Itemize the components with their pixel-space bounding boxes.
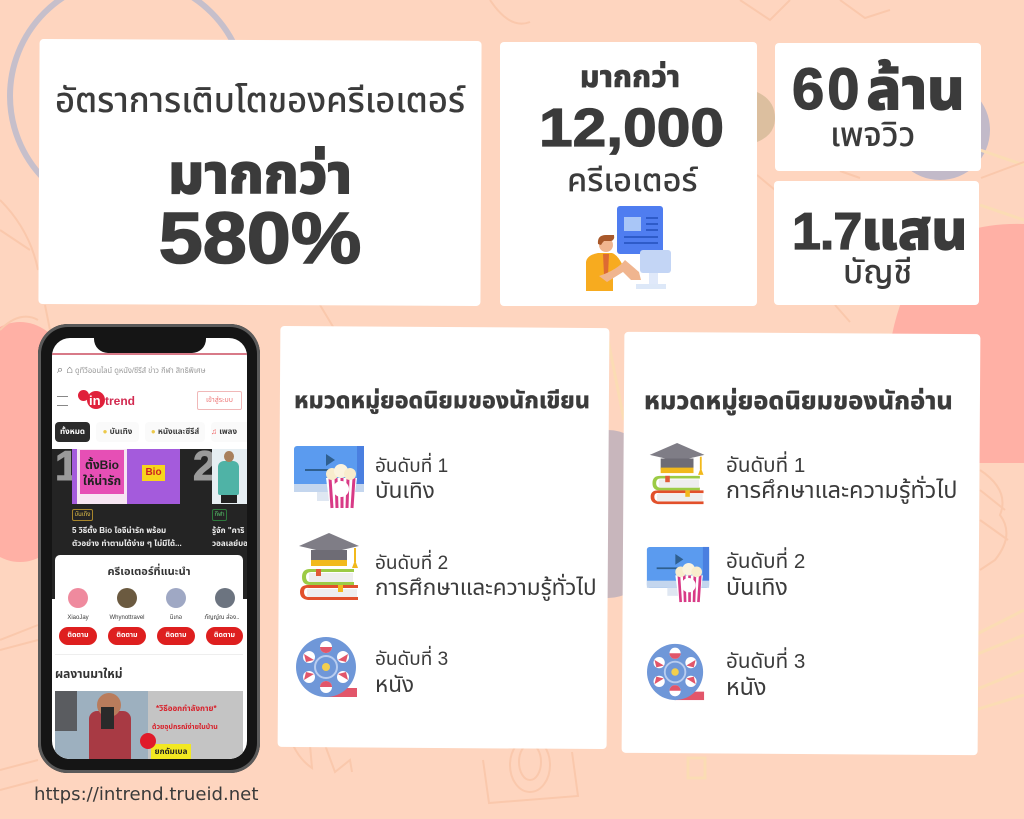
- stat: 170 thousand: 1.7แสน: [792, 199, 968, 261]
- category tabs: ทั้งหมด: [60, 427, 85, 436]
- rank 3 text: [726, 647, 805, 700]
- video thumbnail: ยกดัมเบล: [155, 747, 187, 756]
- category chip 1: บันเทิง: [75, 512, 90, 518]
- article thumbnail 1: ให้น่ารัก: [83, 474, 121, 488]
- panel: writers' popular categories: [279, 327, 608, 748]
- article text 1: 5 วิธีตั้ง Bio ไอจีน่ารัก พร้อม: [72, 526, 166, 535]
- label: creators: ครีเอเตอร์: [567, 162, 698, 198]
- heading: creator growth rate: อัตราการเติบโตของครีเอเตอร์: [55, 82, 465, 120]
- rank 3 text: อันดับที่ 3: [375, 649, 448, 670]
- top navigation: ⌕ ⌂ ดูทีวีออนไลน์ ดูหนัง/ซีรีส์ ข่าว กีฬา สิทธิพิเศษ: [57, 364, 206, 376]
- trending dark section: [52, 449, 247, 599]
- article thumbnail 2: [212, 449, 247, 504]
- follow buttons: ติดตาม: [67, 632, 89, 639]
- category tabs: ● บันเทิง: [103, 427, 132, 436]
- rank 2 text: การศึกษาและความรู้ทั่วไป: [375, 575, 597, 600]
- label: accounts: บัญชี: [843, 253, 912, 290]
- panel: recommended creators: [55, 555, 243, 759]
- heading: writers' popular categories: หมวดหมู่ยอดนิยมของนักเขียน: [294, 387, 590, 413]
- panel: number of creators: [500, 42, 757, 306]
- article text 1: [72, 525, 182, 548]
- notch: [94, 336, 206, 353]
- stat: 580%: 580%: [159, 199, 361, 279]
- icon: education: [299, 533, 359, 600]
- article thumbnail 1: Bio: [145, 467, 162, 478]
- video thumbnail: [55, 691, 243, 759]
- panel: accounts: [774, 181, 979, 305]
- icon: film reel: [296, 637, 357, 697]
- intrend logo: [78, 390, 135, 409]
- article text 2: รู้จัก "คาริ: [212, 526, 244, 535]
- category tabs: ● หนังและซีรีส์: [151, 427, 199, 436]
- login button: [197, 391, 242, 410]
- panel: recommended creators: ภัญญ์ณ ส่อง..: [204, 615, 240, 621]
- rank 1 text: อันดับที่ 1: [726, 454, 805, 477]
- panel: page views: [775, 43, 981, 171]
- icon: entertainment: [294, 446, 364, 508]
- rank numerals: 1: [55, 442, 78, 489]
- stat: 60 million: 60ล้าน: [792, 57, 965, 122]
- label: more than: มากกว่า: [580, 61, 680, 94]
- panel: recommended creators: ติดตาม: [116, 632, 138, 639]
- intrend logo: in: [89, 393, 101, 408]
- rank 2 text: อันดับที่ 2: [726, 550, 805, 573]
- panel: creator growth rate: [39, 40, 481, 305]
- category chip 2: กีฬา: [214, 512, 225, 518]
- article text 2: วอลเลย์บอ: [212, 539, 247, 548]
- trending dark section: 2: [193, 442, 216, 489]
- rank 1 text: [375, 452, 448, 503]
- category tabs: ♫ เพลง: [211, 427, 237, 436]
- heading: recommended creators: ครีเอเตอร์ที่แนะนำ: [107, 566, 191, 578]
- heading: new works: ผลงานมาใหม่: [55, 667, 122, 681]
- article text 1: ตัวอย่าง ทำตามได้ง่าย ๆ ไม่มีได้...: [72, 539, 182, 548]
- article thumbnail 1: [72, 449, 180, 504]
- panel: readers' popular categories: [623, 333, 979, 754]
- icon: film reel: [647, 644, 704, 700]
- rank 3 text: อันดับที่ 3: [726, 650, 805, 673]
- heading: readers' popular categories: หมวดหมู่ยอดนิยมของนักอ่าน: [644, 387, 953, 415]
- phone mockup: [38, 324, 260, 773]
- rank 3 text: หนัง: [726, 674, 766, 700]
- icon: entertainment: [646, 546, 710, 602]
- creator names: XiaoJay: [67, 615, 89, 621]
- rank 1 text: การศึกษาและความรู้ทั่วไป: [726, 477, 957, 503]
- rank 2 text: [726, 547, 805, 600]
- rank 1 text: บันเทิง: [375, 478, 435, 503]
- panel: recommended creators: Whynottravel: [109, 615, 144, 621]
- icon: education: [650, 443, 704, 504]
- panel: recommended creators: ติดตาม: [165, 632, 187, 639]
- stat: 12,000: 12,000: [539, 98, 724, 158]
- follow buttons: [59, 627, 97, 645]
- stat: more than: มากกว่า: [168, 143, 352, 205]
- rank 1 text: [726, 451, 957, 504]
- panel: recommended creators: ติดตาม: [214, 632, 235, 639]
- label: page views: เพจวิว: [830, 116, 915, 154]
- hamburger menu: [57, 396, 68, 406]
- rank 3 text: [375, 646, 448, 697]
- login button: เข้าสู่ระบบ: [206, 397, 233, 404]
- creator avatars: [68, 588, 88, 608]
- article thumbnail 1: ตั้งBio: [85, 458, 119, 472]
- icon: creator at computer: [586, 206, 671, 291]
- phone screen: [52, 338, 247, 759]
- rank 2 text: [375, 550, 597, 601]
- rank 2 text: บันเทิง: [726, 574, 788, 600]
- category chip 1: [72, 509, 93, 521]
- video thumbnail: ด้วยอุปกรณ์ง่ายในบ้าน: [152, 724, 218, 731]
- panel: recommended creators: นิเกอ: [170, 615, 182, 621]
- category tabs: [55, 422, 237, 442]
- rank 3 text: หนัง: [375, 672, 414, 697]
- source url: https://intrend.trueid.net: [34, 784, 258, 805]
- rank 1 text: อันดับที่ 1: [375, 456, 448, 477]
- divider: [55, 654, 243, 655]
- category chip 2: [212, 509, 227, 521]
- article text 2: [212, 526, 247, 548]
- rank 2 text: อันดับที่ 2: [375, 553, 448, 574]
- intrend logo: trend: [105, 394, 135, 408]
- video thumbnail: *วิธีออกกำลังกาย*: [156, 704, 217, 713]
